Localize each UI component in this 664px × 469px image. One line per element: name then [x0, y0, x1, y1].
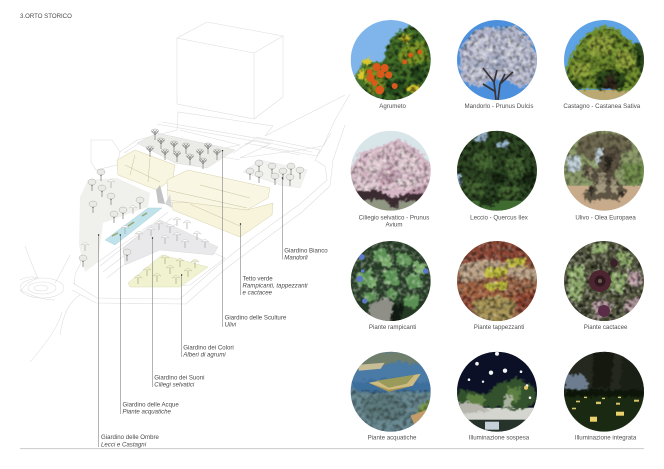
title: 3.ORTO STORICO: [20, 13, 72, 20]
photo: ulivo: [564, 131, 644, 213]
label: giardino dei suoni: [152, 237, 204, 389]
label: giardino bianco: Giardino Bianco: [284, 247, 328, 254]
label: giardino delle ombre: [98, 234, 160, 448]
label: tetto verde: [240, 223, 308, 296]
label: giardino delle acque: Piante acquatiche: [122, 409, 172, 416]
photo: piante tappezzanti: [457, 241, 537, 321]
label: giardino delle ombre: Lecci e Castagni: [101, 442, 147, 448]
trees: giardino delle ombre: [79, 169, 144, 267]
giardino bianco area: [243, 160, 307, 188]
photo: agrumeto: [350, 20, 431, 100]
caption: agrumeto: Agrumeto: [379, 103, 406, 110]
label: tetto verde: Rampicanti, tappezzanti: [242, 282, 308, 289]
photo: castagno: [564, 20, 646, 102]
axonometric site drawing: [20, 22, 350, 362]
photo: ciliegio: [349, 131, 433, 211]
label: giardino delle sculture: Giardino delle Sculture: [225, 314, 287, 322]
trees: giardino dei colori: [134, 256, 199, 284]
bottom rule: [20, 447, 644, 450]
giardino delle acque pool: [105, 208, 162, 245]
label: giardino delle acque: [120, 234, 179, 416]
trees: giardino dei suoni: [135, 218, 209, 248]
caption: ulivo: Ulivo - Olea Europaea: [575, 214, 636, 222]
caption: castagno: Castagno - Castanea Sativa: [563, 103, 641, 110]
photo: illuminazione integrata: [564, 352, 644, 432]
giardino dei colori area: [128, 255, 208, 287]
photo: mandorlo: [457, 20, 539, 100]
label: giardino dei colori: Giardino dei Colori: [183, 344, 234, 352]
caption: ciliegio: Ciliegio selvatico - Prunus: [359, 214, 429, 222]
label: giardino dei colori: Alberi di agrumi: [182, 352, 226, 359]
photo: piante cactacee: [564, 241, 644, 321]
caption: illuminazione sospesa: Illuminazione sospesa: [469, 434, 530, 442]
label: giardino dei colori: [181, 274, 234, 359]
photo: piante acquatiche: [351, 352, 431, 432]
caption: piante cactacee: Piante cactacee: [584, 324, 628, 331]
label: giardino delle sculture: Ulivi: [225, 322, 237, 329]
giardino delle sculture area: [137, 133, 235, 168]
label: tetto verde: e cactacee: [242, 290, 273, 296]
caption: piante rampicanti: Piante rampicanti: [369, 324, 416, 331]
photo: piante rampicanti: [351, 241, 431, 323]
label: giardino dei suoni: Giardino dei Suoni: [154, 374, 204, 382]
label: giardino dei suoni: Ciliegi selvatici: [154, 382, 195, 389]
green roof buildings: [117, 150, 273, 237]
caption: piante acquatiche: Piante acquatiche: [368, 434, 417, 442]
trees: giardino delle sculture: [146, 129, 221, 169]
caption: illuminazione integrata: Illuminazione integrata: [575, 434, 637, 442]
context building volume: [177, 22, 283, 119]
label: giardino delle ombre: Giardino delle Ombre: [101, 434, 160, 441]
giardino delle ombre area: [79, 178, 150, 272]
label: giardino bianco: [282, 177, 328, 262]
label: giardino delle acque: Giardino delle Acque: [122, 402, 179, 408]
label: giardino bianco: Mandorli: [284, 254, 308, 262]
label: tetto verde: Tetto verde: [242, 275, 273, 282]
caption: mandorlo: Mandorlo - Prunus Dulcis: [465, 103, 533, 110]
caption: leccio: Leccio - Quercus Ilex: [470, 214, 528, 222]
caption: piante tappezzanti: Piante tappezzanti: [474, 324, 524, 331]
label: giardino delle sculture: [222, 150, 287, 329]
trees: giardino bianco: [246, 160, 304, 186]
caption: ciliegio: Avium: [386, 222, 402, 229]
photo: leccio: [455, 131, 537, 211]
giardino dei suoni area: [123, 220, 218, 265]
photo: illuminazione sospesa: [457, 352, 537, 432]
context roads and site outlines: [20, 94, 350, 362]
